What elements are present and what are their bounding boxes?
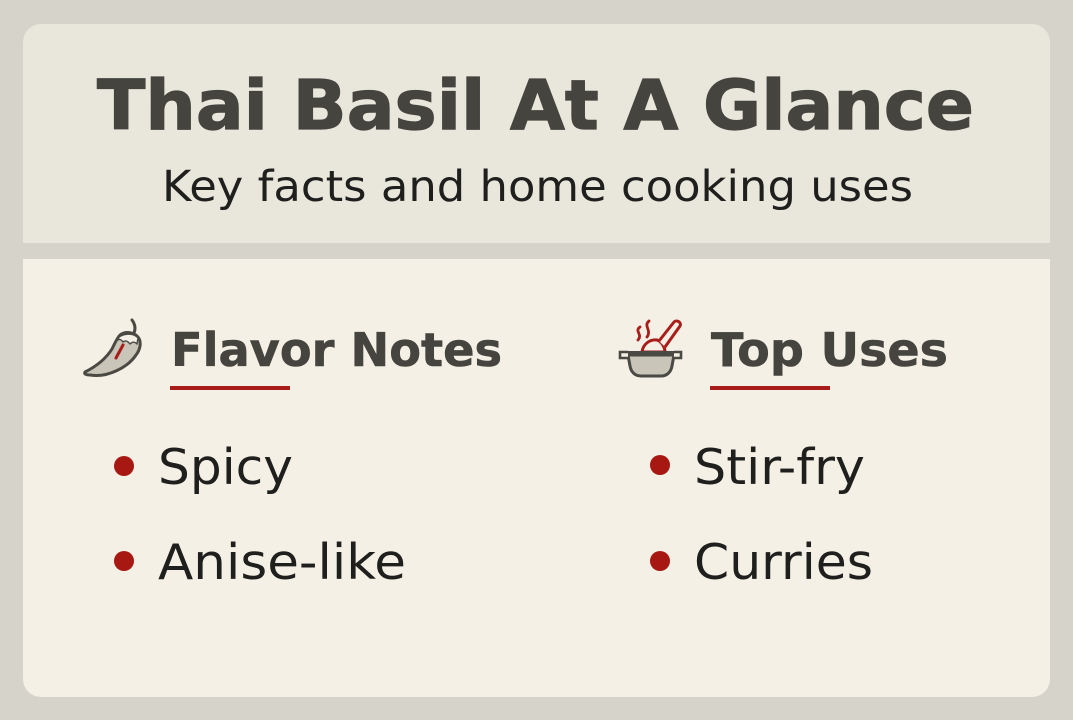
heading: top uses: Top Uses — [711, 323, 948, 377]
icon: pot with spoon and steam — [620, 321, 681, 376]
panel: flavor notes — [85, 320, 502, 591]
list item: curries: Curries — [694, 534, 873, 591]
heading: flavor notes: Flavor Notes — [171, 323, 502, 377]
list item: spicy: Spicy — [158, 439, 293, 496]
panel: top uses — [620, 321, 948, 591]
list item: stir-fry: Stir-fry — [694, 439, 865, 496]
title: Thai Basil At A Glance — [97, 66, 974, 146]
icon: chili pepper — [85, 320, 140, 375]
panel: content — [23, 259, 1050, 697]
subtitle: Key facts and home cooking uses — [162, 162, 913, 212]
panel: header — [23, 24, 1050, 243]
heading underline — [170, 386, 290, 390]
heading underline — [710, 386, 830, 390]
list item: anise-like: Anise-like — [158, 534, 406, 591]
